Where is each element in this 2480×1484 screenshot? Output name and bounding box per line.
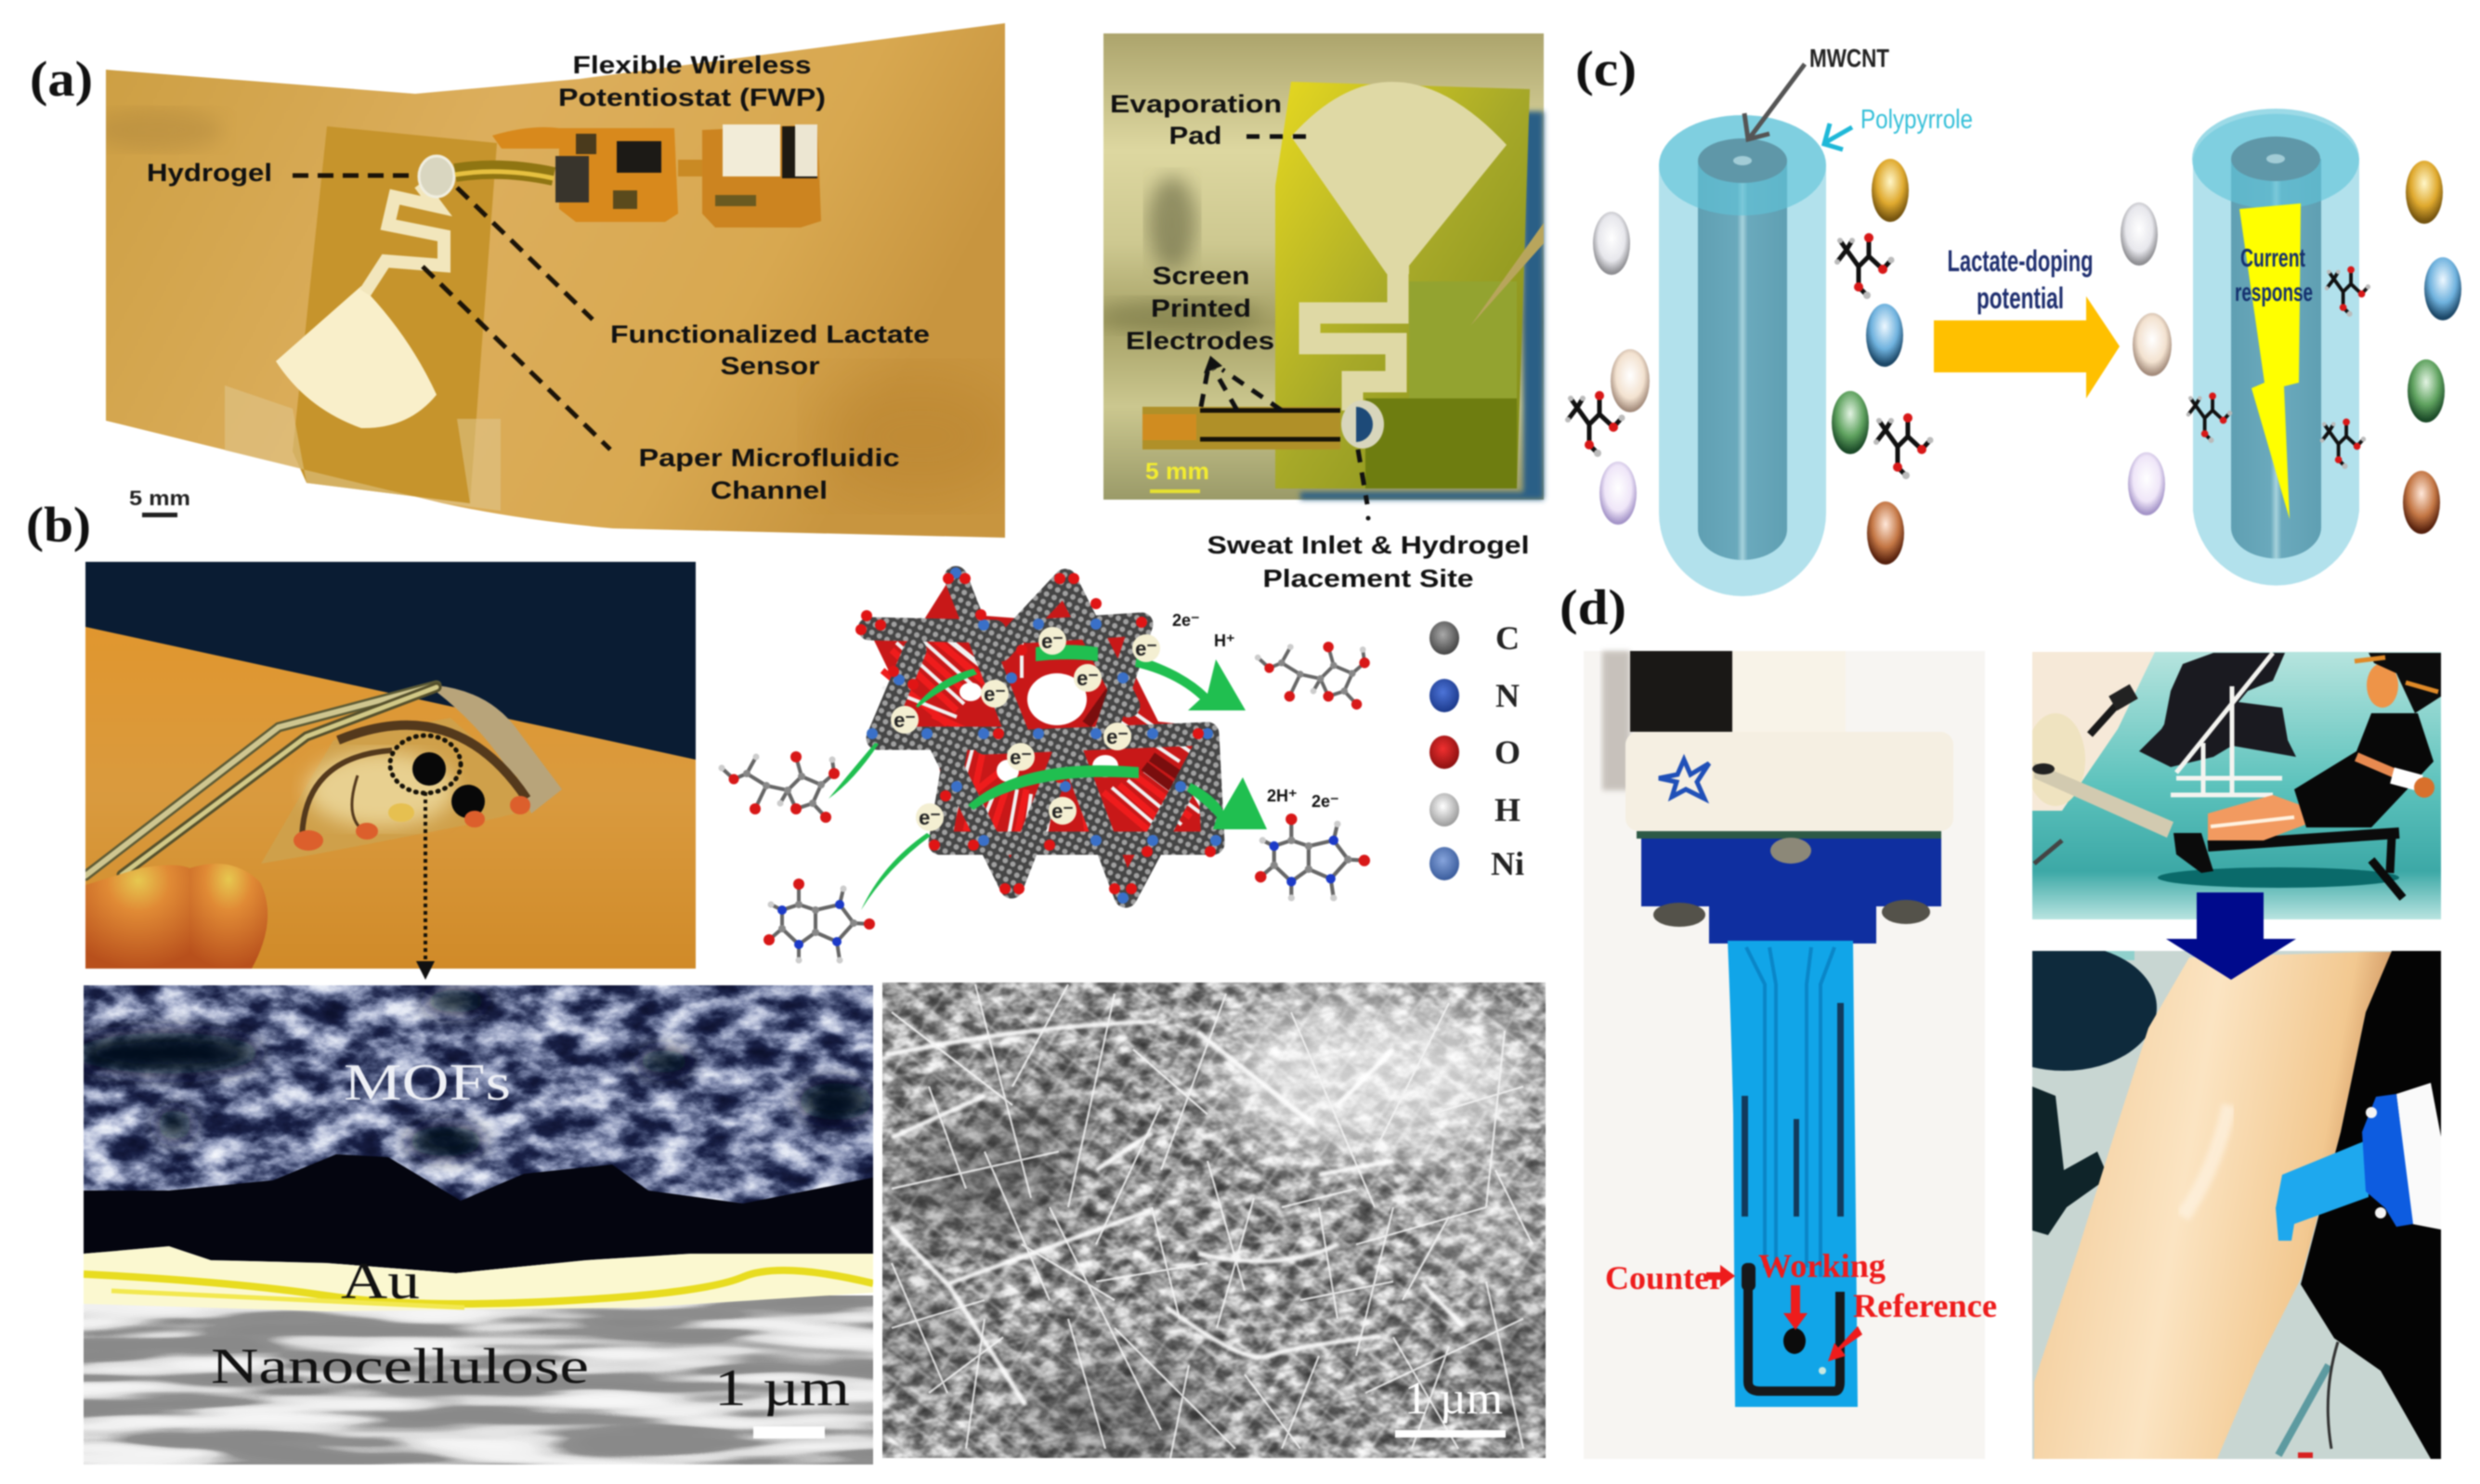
electron markers: e⁻ <box>1010 746 1032 769</box>
red labels: Reference <box>1853 1287 1997 1324</box>
scale bar 1 micron <box>1395 1372 1506 1438</box>
dotted circle <box>390 735 461 793</box>
electron markers: e⁻ <box>1106 725 1129 749</box>
noise background <box>882 983 1546 1458</box>
background equipment <box>2139 653 2296 767</box>
green reaction arrows <box>829 644 1267 910</box>
scale bar 1 micron: 1 µm <box>1404 1372 1503 1424</box>
cable <box>2328 1342 2338 1449</box>
sweat sheen <box>2183 1105 2229 1217</box>
spokes <box>882 618 1200 840</box>
panel d: screen-printed sensor photo <box>1584 651 1997 1459</box>
reaction labels <box>1172 611 1339 811</box>
electron markers: e⁻ <box>919 806 941 829</box>
dashed leaders <box>1201 137 1367 504</box>
screws <box>1653 838 1930 927</box>
MOFs label: MOFs <box>344 1054 511 1112</box>
green pcb edge <box>1637 831 1941 839</box>
current response caption <box>2235 243 2313 306</box>
bench legs <box>2371 836 2403 898</box>
panel b: SEM nanofiber surface <box>882 983 1560 1458</box>
small white gaps <box>959 683 1118 782</box>
reactant and product molecules <box>719 642 1370 964</box>
panel b: SEM cross-section <box>74 985 873 1464</box>
rail <box>2034 762 2173 838</box>
teal top strip <box>2032 951 2134 960</box>
counter electrode <box>1748 1265 1840 1391</box>
hair <box>2369 653 2441 713</box>
dotted arrow <box>424 792 427 962</box>
cable <box>455 170 554 176</box>
Au label: Au <box>341 1253 420 1310</box>
panel d: rowing machine photo <box>2026 652 2441 919</box>
lactate molecules left <box>1565 233 1934 479</box>
wheel hub <box>2032 763 2055 775</box>
star mark <box>1659 760 1709 799</box>
reaction labels: 2e⁻ <box>1312 792 1339 811</box>
lightning bolt <box>2239 203 2301 519</box>
legend C: C <box>1495 619 1520 657</box>
orange contact pads <box>294 796 530 851</box>
chair bars <box>2278 1365 2329 1455</box>
kapton film <box>293 126 497 503</box>
legend H <box>1429 791 1521 828</box>
electron markers <box>891 627 1160 831</box>
strip traces <box>1746 947 1834 1277</box>
current response caption: response <box>2235 278 2313 306</box>
stool seat <box>1971 944 2157 1071</box>
nanocellulose layers <box>84 1295 873 1464</box>
thin fibers <box>892 984 1533 1458</box>
electrode strip <box>1142 407 1340 449</box>
labels: Electrodes <box>1126 327 1274 355</box>
legend C <box>1429 619 1520 657</box>
oxygen atoms <box>855 573 1216 894</box>
screws on plate <box>2366 1107 2386 1218</box>
wall <box>2032 652 2155 811</box>
arrow caption: potential <box>1977 281 2064 315</box>
blue edge <box>1300 111 1544 500</box>
labels: Potentiostat (FWP) <box>558 84 826 111</box>
labels: Evaporation <box>1110 90 1282 118</box>
labels: Hydrogel <box>147 159 272 187</box>
counter electrode cap <box>1742 1263 1756 1291</box>
labels: Flexible Wireless <box>572 51 812 79</box>
orange hair highlights <box>2355 657 2438 692</box>
labels: Pad <box>1168 122 1222 150</box>
dark background <box>84 561 697 761</box>
floor shadow <box>2158 867 2399 888</box>
legend H: H <box>1495 791 1521 828</box>
gold layer <box>84 1246 873 1311</box>
fingers <box>85 864 268 969</box>
sensor body <box>261 718 527 864</box>
printed strip text marks <box>1742 1003 1844 1217</box>
arrow caption <box>1947 244 2094 315</box>
cream sensor centre <box>307 752 455 827</box>
labels <box>1110 90 1529 592</box>
labels: Printed <box>1151 294 1251 322</box>
panel d: sensor on arm photo <box>1971 944 2441 1459</box>
left cylinder <box>1659 115 1826 596</box>
sweat inlet <box>1341 400 1384 449</box>
ions left <box>1593 159 1909 565</box>
lactate molecules right <box>2186 267 2370 469</box>
labels: Sweat Inlet & Hydrogel <box>1207 531 1529 559</box>
scale bar 1 micron: 1 µm <box>714 1360 850 1417</box>
sensor film <box>437 685 562 814</box>
connector block <box>1625 732 1953 831</box>
legend N: N <box>1495 677 1520 714</box>
label (d): (d) <box>1560 579 1626 635</box>
scale bar 5 mm: 5 mm <box>129 487 190 510</box>
red mark <box>2298 1452 2313 1458</box>
navy down arrow <box>2166 892 2296 980</box>
handle grip <box>2108 684 2138 710</box>
right cylinder <box>2192 109 2359 586</box>
bright fibers <box>886 1022 1463 1405</box>
ions right <box>2121 161 2461 534</box>
panel a: wrist sensor photo <box>93 23 1022 538</box>
connector shadow <box>1602 651 1630 790</box>
reaction labels: 2H⁺ <box>1267 787 1298 805</box>
leader lines <box>293 176 610 449</box>
blue strip on arm <box>2276 1139 2369 1241</box>
skin shading <box>93 110 1022 501</box>
reference electrode dot <box>1819 1367 1826 1374</box>
framework silhouette with oxygen-rich spokes <box>867 569 1221 898</box>
doping arrow <box>1934 296 2120 398</box>
electrodes <box>412 752 485 818</box>
wireless potentiostat board <box>492 124 821 228</box>
fiber mesh <box>882 983 1546 1458</box>
tonal patches <box>882 994 1560 1458</box>
reaction labels: H⁺ <box>1214 631 1235 650</box>
paper microfluidic channel <box>276 184 444 428</box>
labels: Paper Microfluidic <box>639 444 899 472</box>
scale bar 1 micron <box>714 1360 850 1438</box>
label (c): (c) <box>1575 41 1637 97</box>
rower torso and shorts <box>2294 713 2434 827</box>
white connector <box>2396 1083 2441 1230</box>
foot plate <box>2173 833 2213 873</box>
electron markers: e⁻ <box>984 683 1006 706</box>
red labels <box>1605 1247 1997 1324</box>
electron markers: e⁻ <box>1051 800 1074 823</box>
working electrode <box>1783 1328 1806 1354</box>
dark clusters <box>74 990 873 1156</box>
arrow head to cross-section <box>416 961 435 980</box>
yellow film <box>1275 82 1530 488</box>
mottled MOF layer <box>84 985 873 1264</box>
rower arm <box>2356 757 2415 782</box>
red arrows <box>1706 1265 1862 1361</box>
legend O: O <box>1495 734 1521 771</box>
scale bar 5 mm <box>129 487 190 517</box>
MWCNT arrow <box>1744 64 1805 139</box>
panel c: lactate doping schematic <box>1565 41 2461 596</box>
white frame <box>2171 653 2282 795</box>
white connector top <box>1732 651 1846 732</box>
legend Ni: Ni <box>1491 845 1524 882</box>
blue plate <box>2362 1094 2413 1227</box>
Nanocellulose label: Nanocellulose <box>211 1338 589 1394</box>
polypyrrole label: Polypyrrole <box>1860 105 1973 135</box>
blurred dark shadow <box>1096 176 1263 332</box>
black MOF film <box>84 1154 873 1273</box>
MWCNT label: MWCNT <box>1809 44 1889 72</box>
atom legend <box>1429 619 1524 882</box>
label (b): (b) <box>26 497 91 553</box>
carbon framework arms <box>869 578 1213 896</box>
red labels: Counter <box>1605 1259 1724 1296</box>
photo background <box>1103 33 1544 500</box>
bench rail <box>2208 833 2399 846</box>
labels: Sensor <box>721 352 820 380</box>
current response caption: Current <box>2240 243 2305 272</box>
polypyrrole arrow <box>1824 124 1852 150</box>
film textures <box>1365 281 1517 488</box>
labels: Functionalized Lactate <box>610 320 930 348</box>
red labels: Working <box>1758 1247 1886 1284</box>
arrow head and end dot <box>1204 356 1371 520</box>
front stand <box>2034 840 2062 864</box>
reaction labels: 2e⁻ <box>1172 611 1200 630</box>
nitrogen atoms <box>867 567 1221 904</box>
background <box>2032 951 2441 1459</box>
tweezers <box>85 685 437 876</box>
wrist band <box>2390 767 2423 791</box>
flywheel <box>2026 713 2085 806</box>
electron markers: e⁻ <box>1135 637 1157 660</box>
skin background <box>106 23 1005 538</box>
labels: Screen <box>1152 262 1250 290</box>
panel a: device photo with evaporation pad <box>1096 33 1544 592</box>
label (a): (a) <box>30 51 93 107</box>
electron markers: e⁻ <box>1077 667 1099 690</box>
evaporation pad and serpentine channel <box>1291 82 1507 410</box>
skin <box>85 627 696 969</box>
labels: Channel <box>711 476 828 504</box>
electron markers: e⁻ <box>894 709 916 732</box>
black clothing <box>2301 951 2441 1459</box>
legend O <box>1429 734 1521 771</box>
tweezer tip <box>1470 223 1544 326</box>
labels <box>147 51 930 504</box>
hand <box>2414 777 2434 798</box>
navy plate <box>1641 839 1941 944</box>
arm <box>2034 952 2392 1459</box>
adhesive tape <box>225 385 501 511</box>
legs of rower <box>2208 795 2305 840</box>
legend N <box>1429 677 1520 714</box>
arrow caption: Lactate-doping <box>1947 244 2094 278</box>
panel b: tweezers holding flexible sensor <box>85 562 696 969</box>
head <box>2367 663 2398 708</box>
electron markers: e⁻ <box>1041 630 1064 653</box>
leg highlight <box>2211 817 2294 827</box>
floor <box>2032 652 2441 919</box>
black cable <box>1630 651 1732 732</box>
labels: Placement Site <box>1263 565 1473 592</box>
scale bar 5 mm yellow: 5 mm <box>1145 459 1209 485</box>
central pore <box>1027 673 1087 725</box>
handle <box>2090 696 2124 735</box>
hydrogel <box>419 156 454 197</box>
MOF molecular structure <box>719 567 1370 964</box>
background <box>1584 651 1985 1459</box>
stool base <box>2032 1087 2108 1235</box>
legend Ni <box>1429 845 1524 882</box>
blue sensor strip <box>1728 941 1858 1407</box>
metal traces <box>302 725 527 842</box>
